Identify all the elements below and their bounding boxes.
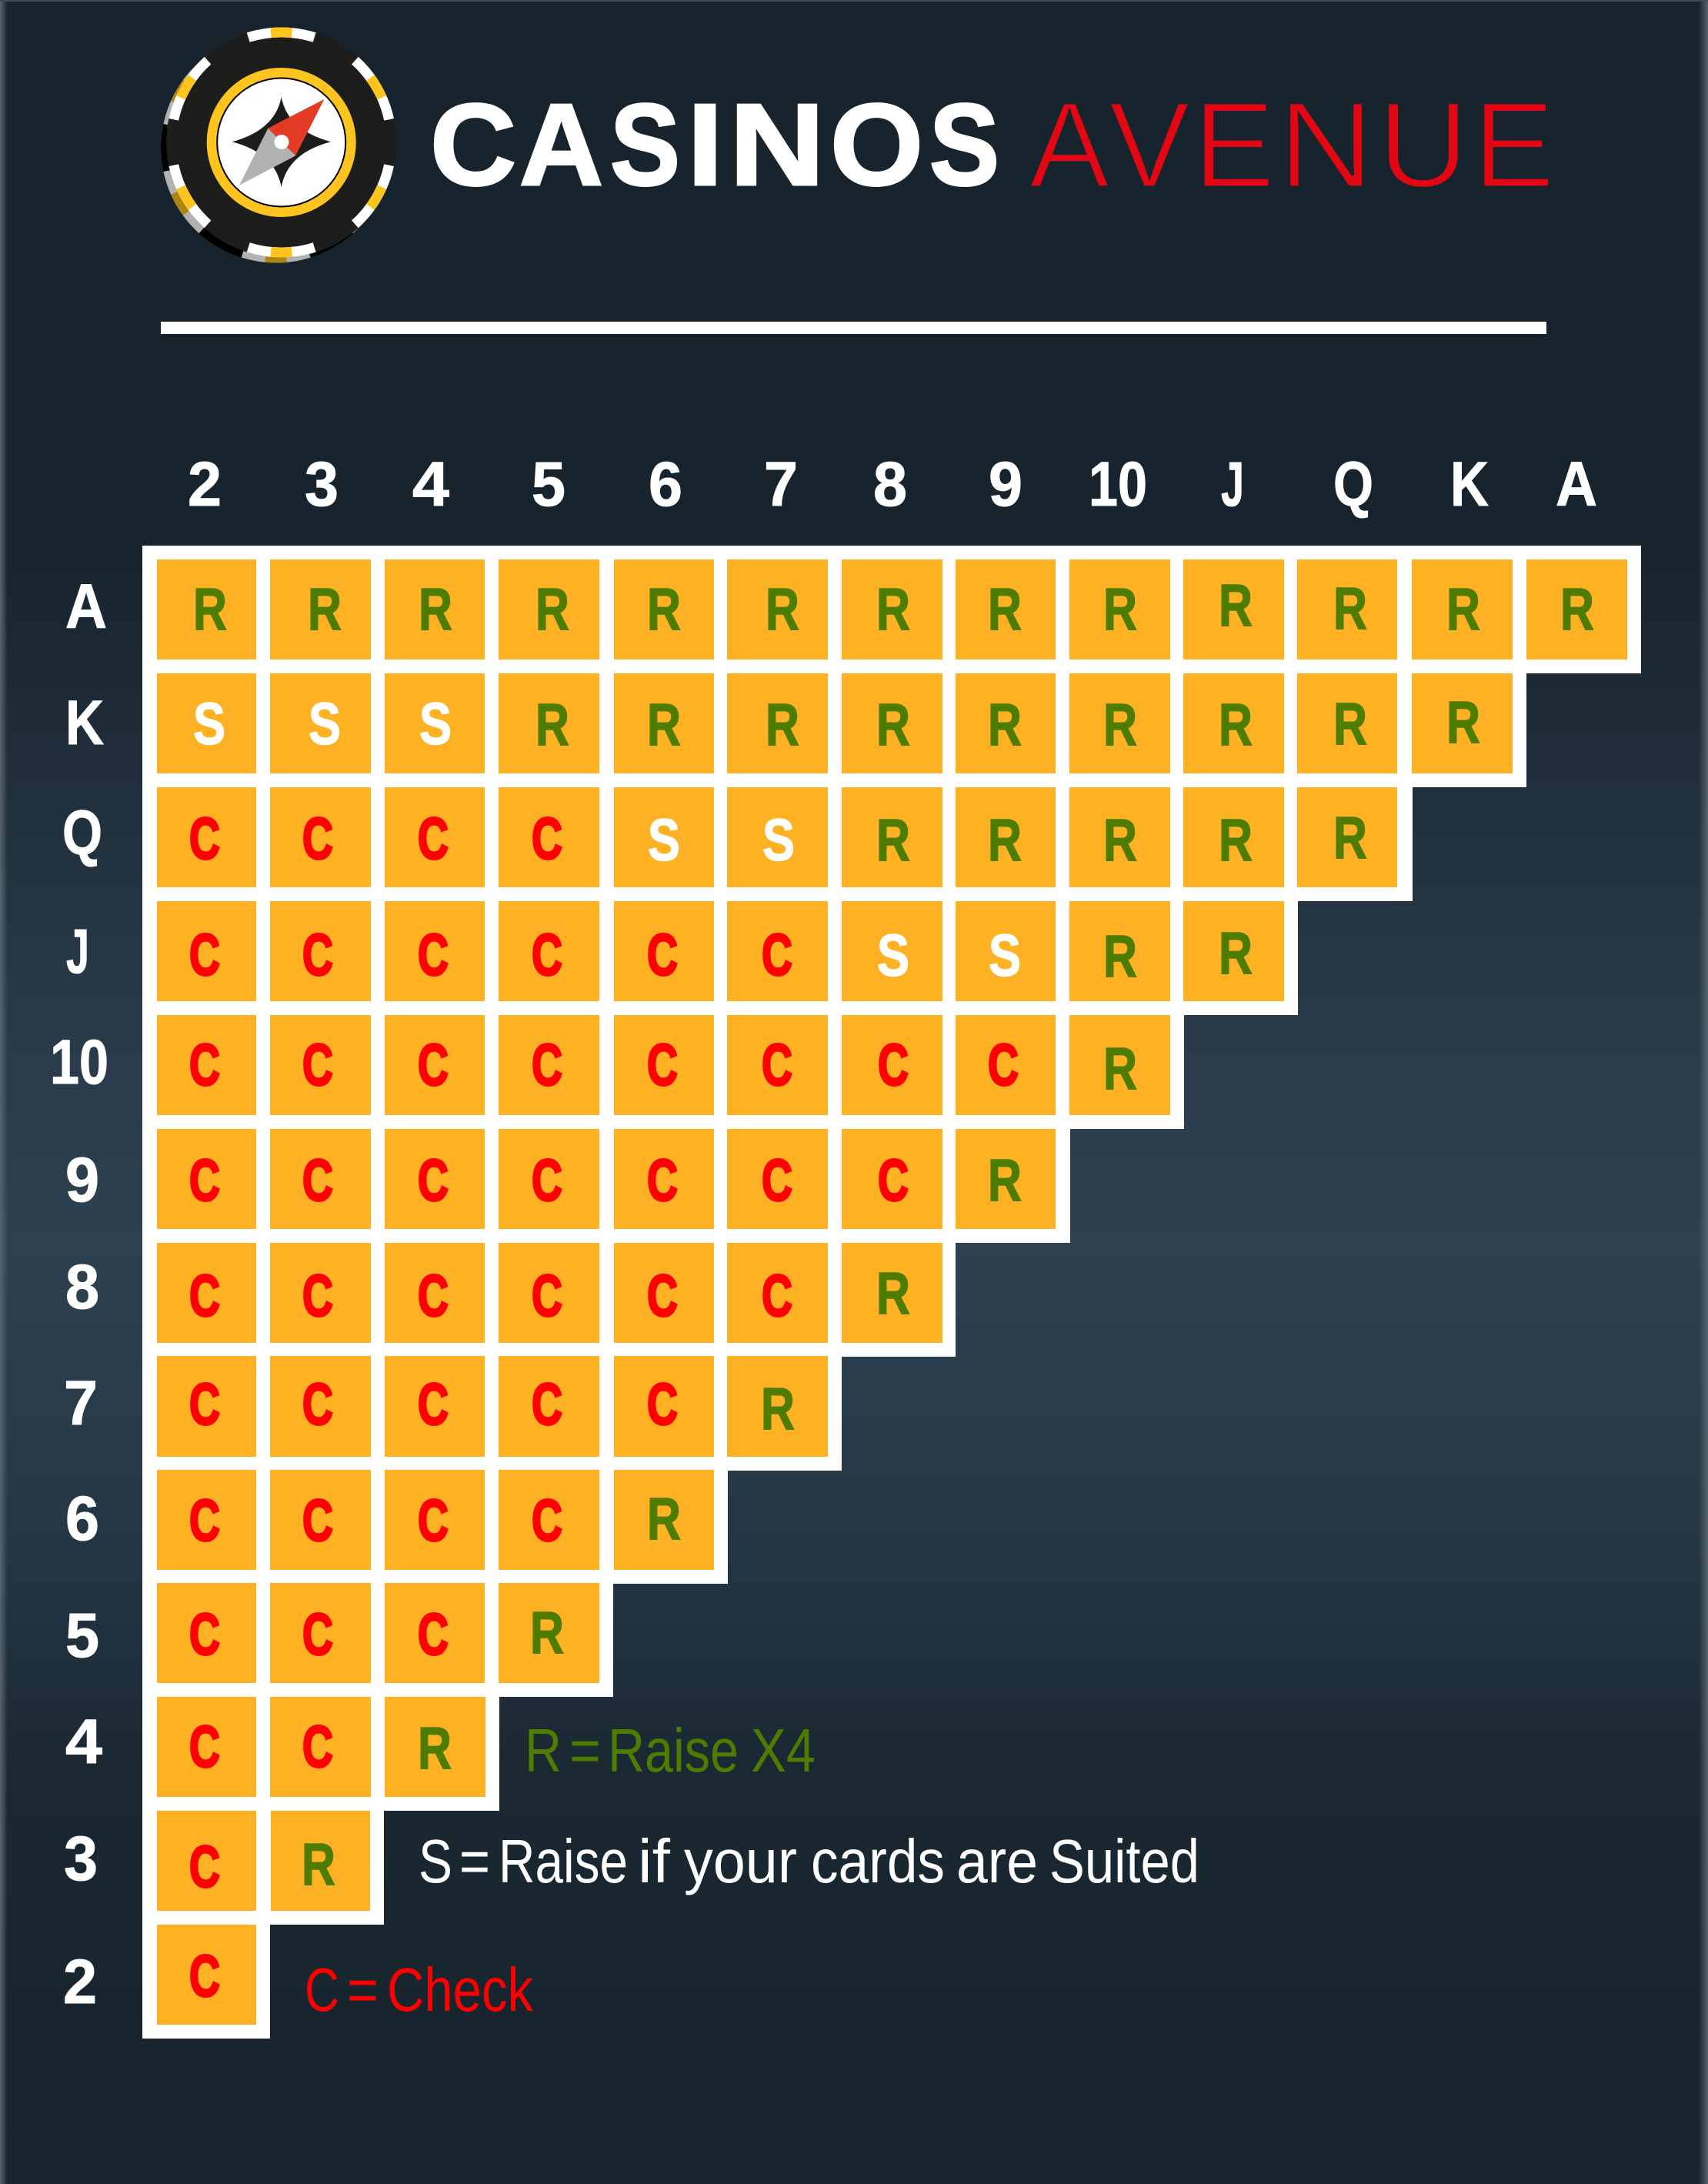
grid row Q: R [1219, 807, 1253, 873]
legend: suited: Suited [1049, 1827, 1199, 1895]
grid row 10: R [1103, 1036, 1137, 1102]
grid row 6: C [532, 1488, 562, 1554]
column headers: J [1221, 449, 1244, 519]
column headers: 2 [188, 449, 222, 519]
grid row 10: C [532, 1033, 562, 1098]
grid row A: R [647, 576, 681, 643]
column headers: 10 [1089, 449, 1147, 519]
grid row Q: R [1333, 805, 1367, 871]
grid row A: R [1446, 576, 1480, 643]
grid row K: R [647, 692, 681, 758]
grid row J: C [532, 923, 562, 988]
grid row J: C [302, 923, 333, 988]
legend: suited: your [684, 1827, 797, 1895]
row headers: K [65, 688, 104, 758]
divider line [161, 322, 1546, 334]
grid row A [157, 559, 1627, 660]
grid row A: R [193, 576, 227, 643]
grid row Q: R [876, 807, 910, 873]
grid row 8: R [876, 1261, 910, 1327]
grid row 4 [157, 1697, 485, 1797]
grid row 10: C [302, 1033, 333, 1098]
grid row 3 [157, 1811, 370, 1911]
grid row 7: C [647, 1372, 678, 1438]
grid row 4: C [189, 1715, 220, 1780]
title: CASINOS AVENUE: E [1193, 76, 1275, 213]
grid row 10: C [988, 1033, 1019, 1098]
grid row 6: C [302, 1488, 333, 1554]
grid row J: R [1219, 920, 1253, 987]
grid row A: R [1333, 576, 1367, 642]
column headers: 8 [873, 449, 907, 519]
column headers: 6 [649, 449, 682, 519]
grid row A: R [308, 576, 342, 643]
title: CASINOS AVENUE: N [729, 79, 825, 209]
grid row A: R [419, 576, 452, 643]
chip rim stripes [174, 32, 389, 252]
column headers: A [1556, 449, 1597, 519]
title: CASINOS AVENUE: A [519, 79, 603, 209]
grid row 8: C [418, 1264, 449, 1329]
row headers: 7 [64, 1368, 98, 1438]
grid row A: R [1219, 573, 1253, 639]
grid row J: S [877, 923, 909, 989]
grid row K: S [193, 691, 225, 757]
grid row Q: C [418, 806, 449, 872]
grid row J: C [647, 923, 678, 988]
grid row 10: C [189, 1033, 220, 1098]
row headers: 3 [64, 1824, 98, 1894]
grid row 7: C [418, 1372, 449, 1438]
row headers: J [66, 917, 89, 987]
grid row 8: C [762, 1264, 792, 1329]
column headers: Q [1333, 449, 1373, 519]
legend: check: C [305, 1955, 339, 2024]
grid row K: R [988, 692, 1022, 758]
grid row 5: C [302, 1602, 333, 1668]
column headers: 3 [305, 449, 339, 519]
grid row J [157, 901, 1284, 1001]
grid row K: R [1219, 692, 1253, 758]
title: CASINOS AVENUE: S [610, 79, 680, 209]
grid row 4: C [302, 1715, 333, 1780]
grid row 2 [157, 1925, 256, 2025]
grid row K: S [309, 691, 341, 757]
grid row 8 [157, 1243, 942, 1343]
grid row Q: R [988, 807, 1022, 873]
grid row 7: C [302, 1372, 333, 1438]
legend: suited: S [419, 1827, 452, 1895]
grid row 5: C [418, 1602, 449, 1668]
grid row 9: R [988, 1147, 1022, 1214]
grid row Q: S [648, 807, 680, 873]
grid row 9: C [189, 1148, 220, 1214]
grid row Q: S [762, 807, 795, 873]
grid row A: R [766, 576, 799, 643]
grid row K: R [1446, 690, 1480, 756]
grid row 9: C [418, 1148, 449, 1214]
grid row 9: C [302, 1148, 333, 1214]
grid row J: S [989, 923, 1021, 989]
grid row 6: R [647, 1486, 681, 1552]
legend: suited: if [638, 1827, 671, 1895]
grid row 9: C [647, 1148, 678, 1214]
grid row A: R [1103, 576, 1137, 643]
grid row J: C [762, 923, 792, 988]
grid row 3: C [189, 1835, 220, 1900]
grid row 10: C [762, 1033, 792, 1098]
title: CASINOS AVENUE [430, 76, 1554, 213]
grid row J: C [189, 923, 220, 988]
row headers: Q [62, 798, 102, 868]
title: CASINOS AVENUE: S [929, 79, 999, 209]
grid row 3: R [302, 1832, 335, 1898]
grid row 6: C [189, 1488, 220, 1554]
grid row 10: C [418, 1033, 449, 1098]
chip inner ring [207, 68, 356, 217]
grid row 9: C [532, 1148, 562, 1214]
column headers: 5 [532, 449, 565, 519]
row headers: 2 [63, 1947, 97, 2017]
legend: suited: cards [811, 1827, 945, 1895]
grid row Q: R [1103, 807, 1137, 873]
grid row Q [157, 787, 1397, 887]
grid row K: R [1333, 691, 1367, 757]
grid row 8: C [302, 1264, 333, 1329]
legend: raise: = [569, 1716, 601, 1785]
chip side extrusion [161, 32, 391, 263]
grid row K: R [876, 692, 910, 758]
title: CASINOS AVENUE: O [830, 79, 923, 209]
column headers: 9 [989, 449, 1022, 519]
grid: white staircase backing [142, 546, 1641, 2039]
legend: raise: X4 [751, 1716, 816, 1785]
row headers: 8 [65, 1252, 99, 1322]
grid row 8: C [189, 1264, 220, 1329]
grid row 7: C [532, 1372, 562, 1438]
title: CASINOS AVENUE: I [687, 79, 723, 209]
title: CASINOS AVENUE: A [1029, 76, 1109, 213]
row headers: 5 [65, 1601, 99, 1671]
grid row K: R [535, 692, 569, 758]
grid row A: R [876, 576, 910, 643]
grid row 7: R [761, 1376, 795, 1442]
legend: raise: Raise [608, 1716, 739, 1785]
compass star [232, 97, 331, 187]
grid row K: R [766, 692, 799, 758]
grid row 10: C [647, 1033, 678, 1098]
grid row J: R [1103, 923, 1137, 990]
legend: suited: are [956, 1827, 1038, 1895]
grid row J: C [418, 923, 449, 988]
title: CASINOS AVENUE: C [430, 79, 516, 209]
grid row K [157, 673, 1513, 773]
logo: compass poker chip [161, 28, 396, 263]
grid row Q: C [532, 806, 562, 872]
grid row 6: C [418, 1488, 449, 1554]
grid row 5: R [530, 1600, 564, 1666]
grid row A: R [1560, 576, 1594, 643]
row headers: 9 [65, 1145, 99, 1215]
grid row 6 [157, 1470, 714, 1570]
grid row Q: C [302, 806, 333, 872]
grid row 8: C [532, 1264, 562, 1329]
grid row K: S [419, 691, 452, 757]
legend: check: Check [387, 1955, 534, 2024]
grid row 4: R [418, 1715, 452, 1782]
grid row 9 [157, 1129, 1056, 1229]
grid row K: R [1103, 692, 1137, 758]
grid row 7: C [189, 1372, 220, 1438]
column headers: 7 [764, 449, 798, 519]
grid row 10 [157, 1015, 1170, 1115]
row headers [50, 572, 108, 2017]
grid row 5: C [189, 1602, 220, 1668]
legend: check: = [347, 1955, 379, 2024]
title: CASINOS AVENUE: V [1109, 76, 1190, 213]
grid row Q: C [189, 806, 220, 872]
grid row 8: C [647, 1264, 678, 1329]
column headers: K [1450, 449, 1489, 519]
title: CASINOS AVENUE: E [1473, 76, 1554, 213]
chip face [166, 28, 396, 257]
grid row 7 [157, 1356, 828, 1457]
row headers: 4 [65, 1707, 102, 1777]
grid row A: R [535, 576, 569, 643]
column headers: 4 [412, 449, 449, 519]
grid row 2: C [189, 1944, 220, 2009]
title: CASINOS AVENUE: N [1278, 76, 1374, 213]
grid row 10: C [878, 1033, 909, 1098]
grid row 5 [157, 1583, 599, 1683]
legend: suited: Raise [499, 1827, 628, 1895]
column headers [188, 449, 1597, 519]
row headers: 6 [65, 1484, 99, 1554]
row headers: A [65, 572, 107, 642]
title: CASINOS AVENUE: U [1378, 76, 1469, 213]
legend: suited: = [459, 1827, 490, 1895]
grid row 9: C [878, 1148, 909, 1214]
compass needle [239, 99, 324, 185]
grid row A: R [988, 576, 1022, 643]
row headers: 10 [50, 1027, 108, 1097]
legend: raise: R [525, 1716, 562, 1785]
grid row 9: C [762, 1148, 792, 1214]
